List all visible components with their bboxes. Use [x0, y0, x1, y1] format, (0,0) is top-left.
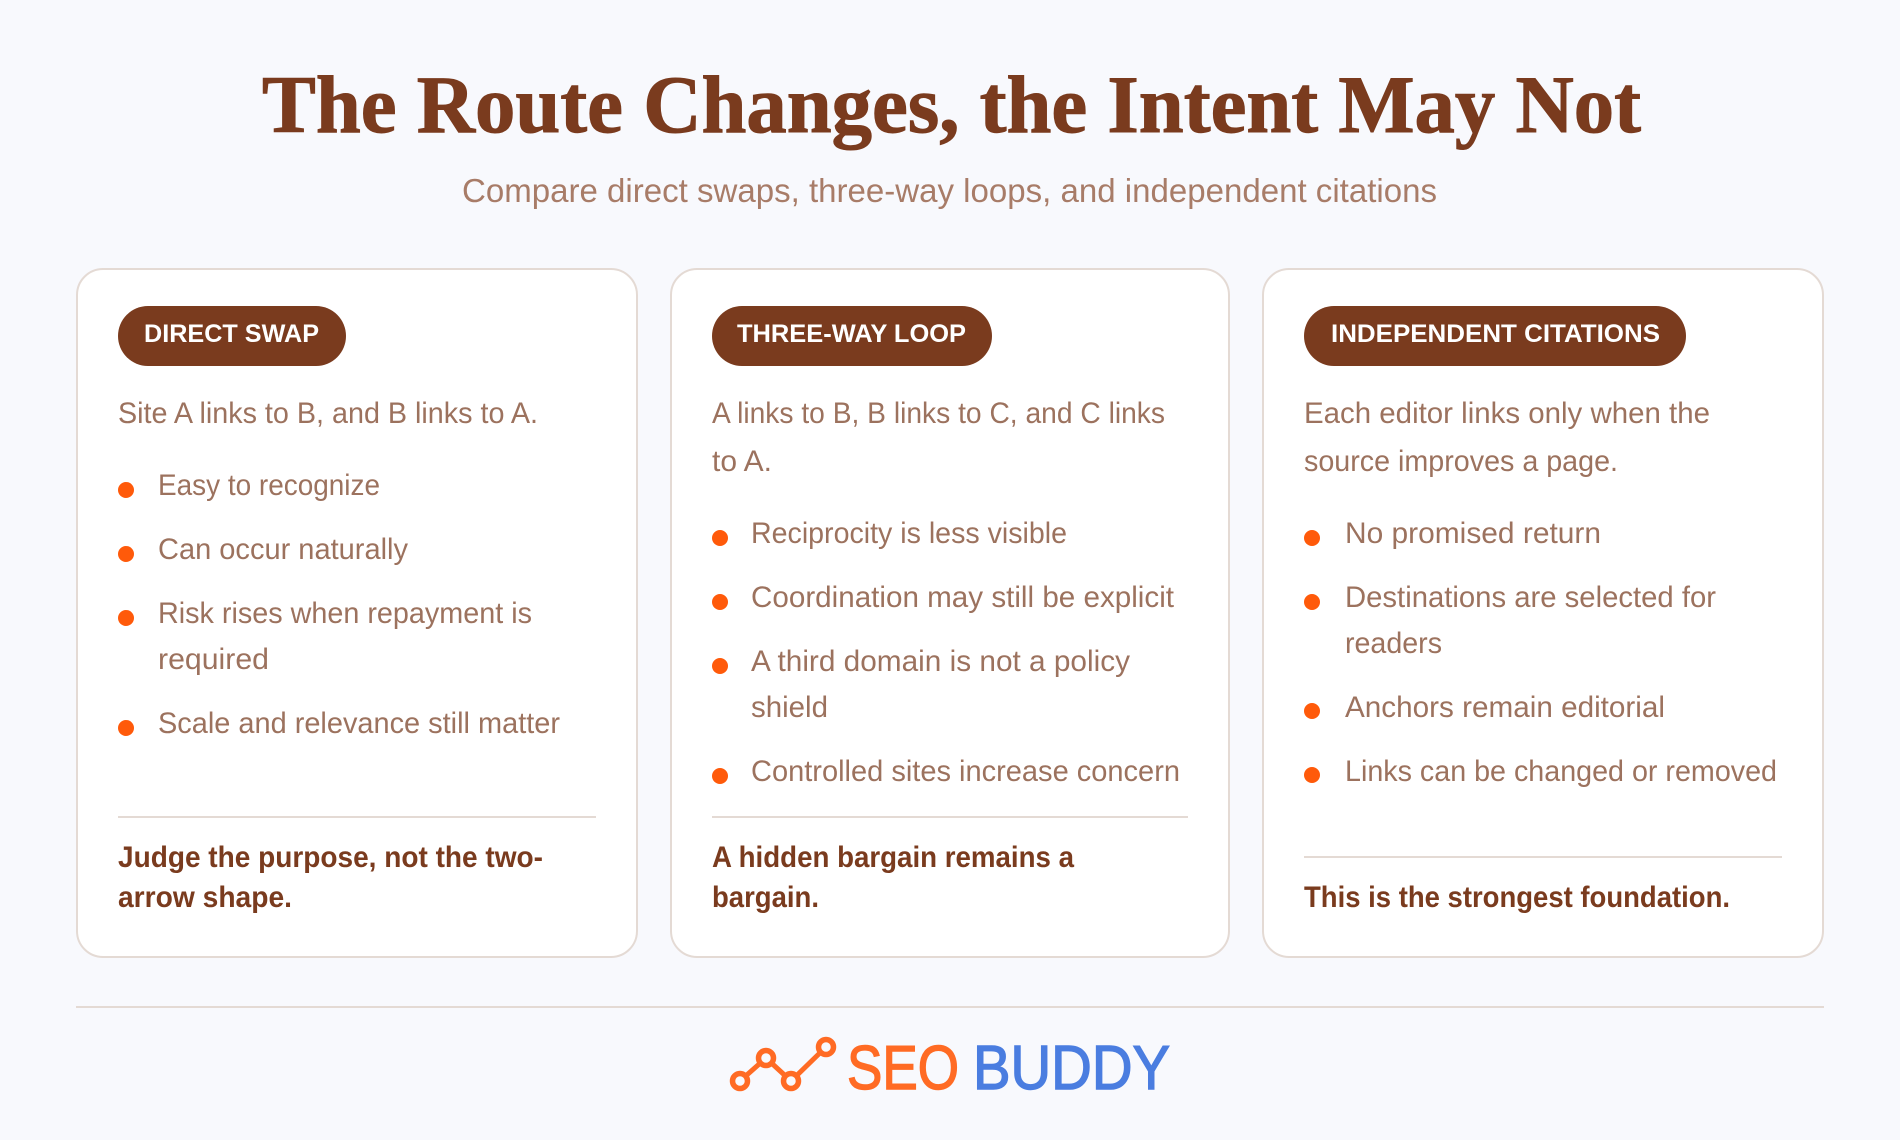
bullet list: Risk rises when repayment is	[158, 597, 532, 630]
bullet list: Coordination may still be explicit	[751, 581, 1175, 614]
bullet list: Reciprocity is less visible	[751, 517, 1067, 550]
badge: independent citations	[1304, 306, 1686, 366]
takeaway: Judge the purpose, not the two-	[118, 841, 543, 874]
bullet list: Destinations are selected for	[1345, 581, 1716, 614]
bullet list: No promised return	[1345, 517, 1601, 550]
badge: direct swap	[118, 306, 346, 366]
bullet list: Links can be changed or removed	[1345, 755, 1777, 788]
wordmark: BUDDY: BUDDY	[973, 1034, 1170, 1103]
takeaway: A hidden bargain remains a	[712, 841, 1074, 874]
bullet list	[118, 469, 560, 740]
panel: independent citations	[1263, 269, 1823, 957]
description: A links to B, B links to C, and C links	[712, 397, 1165, 430]
badge: three-way loop	[712, 306, 992, 366]
bullet list: Can occur naturally	[158, 533, 408, 566]
title: The Route Changes, the Intent May Not	[262, 59, 1641, 150]
icon: line chart	[732, 1040, 834, 1088]
description: source improves a page.	[1304, 445, 1618, 478]
takeaway: arrow shape.	[118, 881, 292, 914]
bullet list	[1304, 517, 1777, 788]
description: Site A links to B, and B links to A.	[118, 397, 538, 430]
takeaway	[118, 841, 543, 914]
panel: three-way loop	[671, 269, 1229, 957]
description: Each editor links only when the	[1304, 397, 1710, 430]
takeaway: bargain.	[712, 881, 819, 914]
description	[1304, 397, 1710, 478]
takeaway: This is the strongest foundation.	[1304, 881, 1730, 914]
bullet list: readers	[1345, 627, 1442, 660]
badge: independent citations: INDEPENDENT CITATIONS	[1331, 320, 1660, 348]
wordmark: SEO: SEO	[847, 1034, 959, 1103]
description	[712, 397, 1165, 478]
subtitle: Compare direct swaps, three-way loops, and independent citations	[462, 172, 1437, 209]
bullet list: Scale and relevance still matter	[158, 707, 560, 740]
badge: three-way loop: THREE-WAY LOOP	[737, 320, 966, 348]
bullet list: shield	[751, 691, 828, 724]
panel: direct swap	[77, 269, 637, 957]
logo: SEO Buddy	[732, 1034, 1170, 1103]
bullet list: Controlled sites increase concern	[751, 755, 1180, 788]
badge: direct swap: DIRECT SWAP	[144, 320, 319, 348]
takeaway	[712, 841, 1074, 914]
bullet list: required	[158, 643, 269, 676]
bullet list: A third domain is not a policy	[751, 645, 1130, 678]
bullet list: Easy to recognize	[158, 469, 380, 502]
description: to A.	[712, 445, 772, 478]
bullet list	[712, 517, 1180, 788]
bullet list: Anchors remain editorial	[1345, 691, 1665, 724]
